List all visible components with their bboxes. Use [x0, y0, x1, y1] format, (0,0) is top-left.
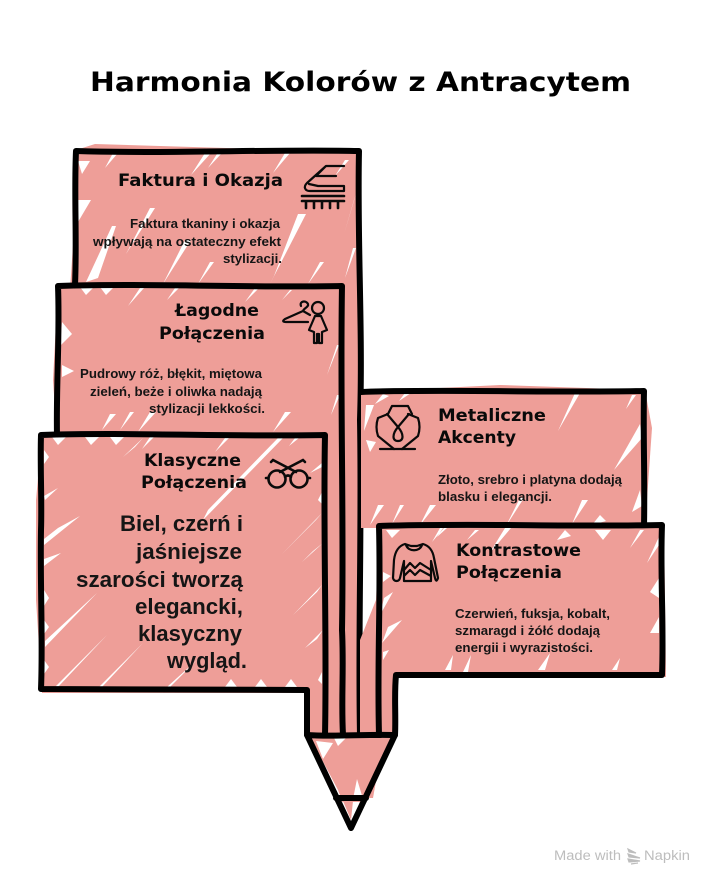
body text: szarości tworzą	[76, 567, 244, 592]
body text: Pudrowy róż, błękit, miętowa	[80, 366, 263, 381]
panel: Kontrastowe Połączenia	[360, 522, 666, 735]
body text: stylizacji.	[223, 251, 282, 266]
heading: Połączenia	[159, 324, 265, 344]
body text: energii i wyrazistości.	[455, 640, 593, 655]
heading	[141, 451, 247, 493]
body text	[92, 216, 282, 266]
heading: Łagodne	[174, 301, 259, 321]
body text	[455, 606, 610, 655]
pencil tip	[307, 735, 395, 828]
icon: sweater	[393, 544, 438, 581]
body text: Czerwień, fuksja, kobalt,	[455, 606, 610, 621]
body text: blasku i elegancji.	[438, 489, 552, 504]
heading	[456, 541, 581, 583]
body text	[80, 366, 265, 416]
panel: Metaliczne Akcenty	[361, 385, 652, 528]
icon: napkin logo	[628, 849, 640, 864]
body text: szmaragd i żółć dodają	[455, 623, 601, 638]
body text: wpływają na ostateczny efekt	[92, 234, 282, 249]
heading: Metaliczne	[438, 406, 546, 426]
body text	[438, 472, 623, 504]
panel: Klasyczne Połączenia	[36, 431, 330, 735]
panel outline	[41, 434, 326, 735]
body text: jaśniejsze	[135, 539, 242, 564]
body text: elegancki,	[135, 594, 243, 619]
body text: Złoto, srebro i platyna dodają	[438, 472, 623, 487]
body text: Biel, czerń i	[120, 511, 243, 536]
body text: zieleń, beże i oliwka nadają	[90, 384, 263, 399]
panel: Faktura i Okazja	[70, 144, 361, 735]
heading: Połączenia	[141, 473, 247, 493]
body text	[76, 511, 247, 673]
credit: Made with Napkin: Made with	[554, 848, 621, 863]
panel: Łagodne Połączenia	[53, 283, 350, 735]
heading: Akcenty	[438, 428, 516, 448]
credit: Made with Napkin: Napkin	[644, 848, 690, 863]
heading: Faktura i Okazja	[118, 171, 283, 191]
icon: glasses	[266, 460, 310, 488]
credit: Made with Napkin	[554, 848, 690, 864]
heading	[438, 406, 546, 448]
body text: Faktura tkaniny i okazja	[130, 216, 281, 231]
panel outline	[378, 525, 663, 735]
body text: wygląd.	[166, 648, 247, 673]
heading: Połączenia	[456, 563, 562, 583]
icon: train	[302, 166, 344, 208]
icon: hanger and figure	[283, 302, 327, 343]
heading: Klasyczne	[144, 451, 241, 471]
body text: klasyczny	[138, 621, 243, 646]
title: Harmonia Kolorów z Antracytem	[90, 67, 631, 98]
body text: stylizacji lekkości.	[149, 401, 265, 416]
panel outline	[361, 391, 644, 526]
heading: Kontrastowe	[456, 541, 581, 561]
heading	[159, 301, 265, 344]
panel outline	[75, 151, 361, 735]
panel outline	[57, 285, 343, 735]
icon: necklace	[376, 406, 420, 449]
